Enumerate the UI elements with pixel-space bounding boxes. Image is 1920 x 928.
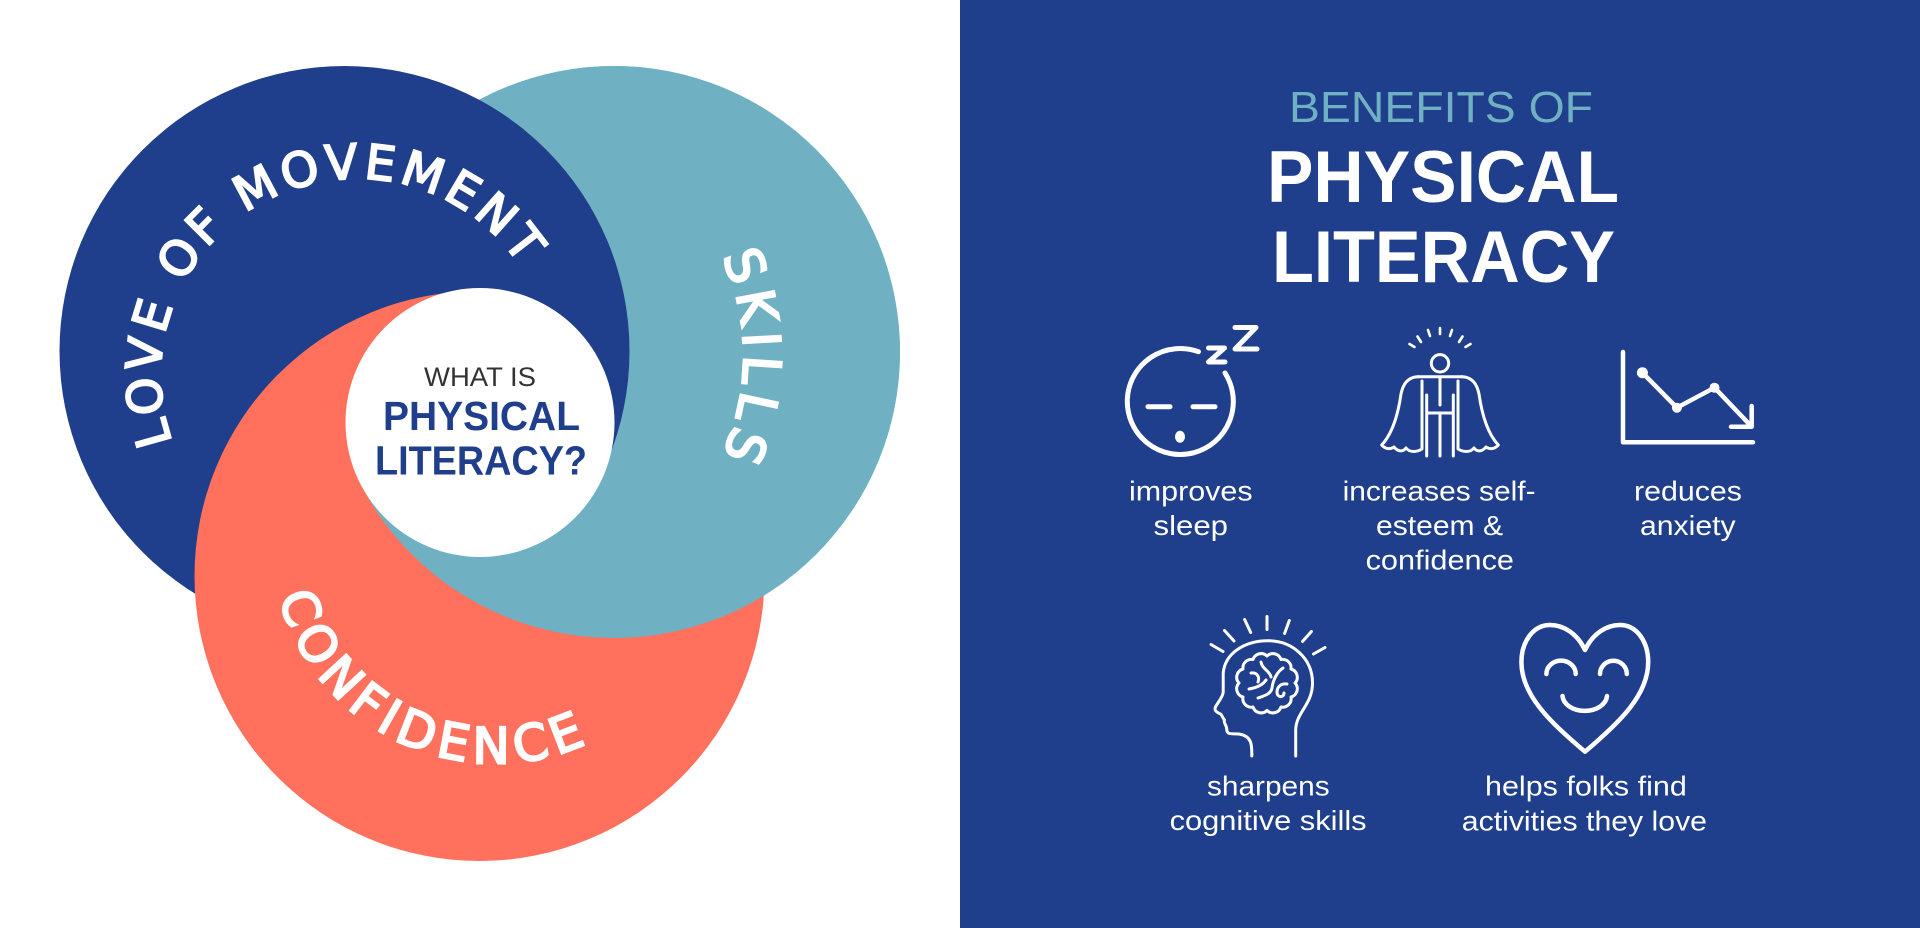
- text: sharpens cognitive skills: sharpens: [1207, 771, 1330, 802]
- text: improves sleep: [1129, 476, 1253, 541]
- center text: literacy: LITERACY?: [375, 438, 587, 484]
- icon: smiling heart: [1521, 625, 1648, 752]
- text: increases self-esteem and confidence: esteem &: [1376, 510, 1503, 541]
- text: helps folks find activities they love: [1462, 771, 1707, 837]
- heading: benefits of: BENEFITS OF: [1289, 83, 1593, 132]
- text: improves sleep: sleep: [1154, 510, 1228, 541]
- center circle: [346, 288, 614, 557]
- text: increases self-esteem and confidence: [1343, 476, 1536, 575]
- text: helps folks find activities they love: helps folks find: [1485, 771, 1687, 802]
- label: skills: SKILLS: [724, 248, 783, 465]
- label: love of movement: LOVE OF MOVEMENT: [124, 142, 550, 448]
- center text: physical: PHYSICAL: [383, 393, 580, 439]
- label: confidence: CONFIDENCE: [282, 590, 586, 765]
- heading: literacy: LITERACY: [1272, 217, 1615, 298]
- heading: physical: PHYSICAL: [1267, 137, 1619, 218]
- text: reduces anxiety: [1634, 476, 1742, 541]
- text: sharpens cognitive skills: [1170, 771, 1367, 836]
- text: increases self-esteem and confidence: increases self-: [1343, 476, 1536, 507]
- text: reduces anxiety: anxiety: [1640, 510, 1736, 541]
- text: sharpens cognitive skills: cognitive skills: [1170, 805, 1367, 836]
- panel: benefits: [960, 0, 1920, 928]
- text: increases self-esteem and confidence: confidence: [1366, 544, 1514, 575]
- panel: what is physical literacy venn diagram: [60, 66, 900, 861]
- center text: what is: WHAT IS: [424, 362, 536, 392]
- text: helps folks find activities they love: activities they love: [1462, 806, 1707, 837]
- icon: declining line chart: [1623, 352, 1753, 442]
- icon: caped figure: [1382, 328, 1498, 456]
- text: reduces anxiety: reduces: [1634, 476, 1742, 507]
- icon: head with brain: [1211, 616, 1325, 756]
- icon: sleeping face: [1127, 328, 1257, 454]
- text: improves sleep: improves: [1129, 476, 1253, 507]
